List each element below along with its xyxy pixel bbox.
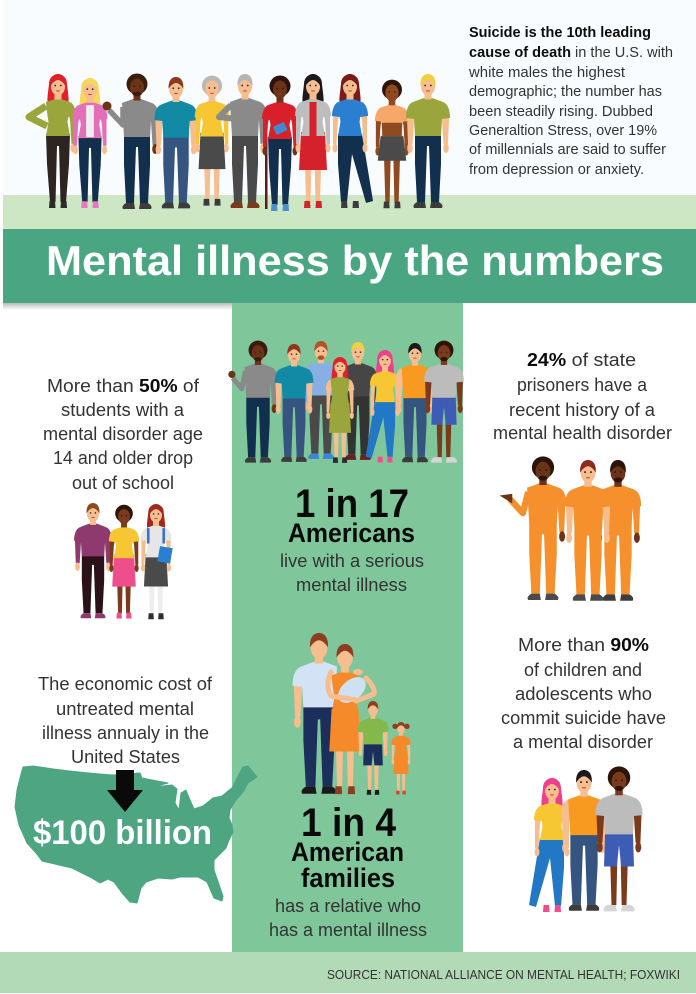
text block: children statistic: commit suicide have	[501, 708, 666, 728]
banner	[3, 229, 696, 303]
person: man in orange tank top	[395, 343, 435, 462]
text block: economic cost	[38, 674, 213, 767]
arrow: down	[107, 770, 143, 812]
statistic: 1 in 4 American families: American	[291, 837, 404, 867]
text block: students statistic: More than 50% of	[47, 376, 200, 396]
statistic: 1 in 17 Americans: Americans	[288, 518, 415, 548]
person: man waving in grey sweater	[228, 341, 278, 463]
person: man in light blue t-shirt	[302, 341, 340, 459]
person: red-haired woman	[29, 74, 76, 208]
text block: suicide statistic: Generaltion Stress, over 19%	[469, 123, 657, 139]
father's hand on mother's shoulder	[353, 669, 363, 675]
illustration: crowd of eleven people	[29, 74, 450, 211]
person: father	[293, 633, 337, 794]
statistic: 1 in 17 Americans	[280, 482, 424, 595]
text block: economic cost: United States	[71, 747, 180, 767]
text block: prisoners statistic: 24% of state	[527, 350, 636, 370]
text block: economic cost: The economic cost of	[38, 674, 213, 694]
person: mother	[329, 644, 361, 794]
text block: children statistic: of children and	[524, 660, 642, 680]
text block: suicide statistic	[468, 25, 673, 178]
text block: students statistic: mental disorder age	[43, 424, 203, 444]
person: woman in red top with blue clutch	[262, 76, 298, 211]
text block: economic cost: illness annualy in the	[42, 723, 209, 743]
banner shadow	[3, 303, 232, 310]
walking cane	[265, 137, 268, 209]
text block: prisoners statistic	[493, 350, 672, 443]
text block: children statistic: adolescents who	[515, 684, 652, 704]
text block: suicide statistic: been steadily rising. Dubbed	[469, 104, 653, 120]
person: prisoner on right	[595, 460, 641, 601]
person: prisoner in centre	[565, 460, 611, 601]
illustration: three young people	[529, 766, 643, 912]
illustration: three students	[74, 503, 173, 619]
person: dark-haired woman in red dress and grey jacket	[295, 74, 331, 208]
text block: students statistic: 14 and older drop	[53, 448, 193, 468]
statistic: 1 in 17 Americans: 1 in 17	[295, 482, 409, 526]
person: prisoner with raised hand	[503, 456, 566, 600]
illustration: three prisoners	[503, 456, 641, 601]
person: blond man in dark sweater	[339, 342, 377, 460]
text block: prisoners statistic: recent history of a	[509, 400, 656, 420]
panel: center column	[232, 303, 463, 952]
person: girl in yellow top and pink skirt	[109, 505, 139, 619]
person: blond man in olive t-shirt	[406, 74, 450, 208]
illustration: family	[293, 633, 411, 795]
person: man in grey t-shirt and blue shorts	[424, 341, 464, 463]
person: red-haired woman in green dress	[326, 357, 354, 463]
statistic: 1 in 17 Americans: live with a serious	[280, 551, 424, 571]
person: man in teal t-shirt	[275, 344, 313, 462]
text block: suicide statistic: Suicide is the 10th leading	[469, 25, 651, 41]
person: older woman in yellow	[195, 76, 229, 206]
map of the United States	[15, 766, 257, 903]
text block: suicide statistic: white males the highest	[468, 65, 625, 81]
person: boy in maroon sweater	[74, 503, 112, 618]
statistic: 1 in 4 American families: 1 in 4	[301, 801, 397, 845]
text block: suicide statistic: demographic; the number has	[469, 84, 662, 100]
text block: students statistic: students with a	[61, 400, 185, 420]
text block: children statistic: a mental disorder	[513, 732, 653, 752]
text block: children statistic: More than 90%	[518, 635, 649, 655]
person: older man with grey hair	[219, 74, 267, 208]
person: pink-haired woman	[529, 778, 570, 912]
ground band	[3, 195, 696, 229]
title: Mental illness by the numbers	[46, 237, 664, 284]
statistic: 1 in 4 American families: has a mental illness	[269, 920, 427, 940]
text block: suicide statistic: from depression or anxiety.	[469, 162, 644, 178]
person: blonde woman in pink	[73, 78, 107, 208]
illustration: group of eight people	[228, 341, 464, 463]
sky band	[3, 0, 696, 196]
person: man in teal t-shirt	[154, 77, 198, 208]
person: man in orange tank top	[561, 770, 607, 911]
statistic: 1 in 4 American families	[269, 801, 427, 940]
person: schoolgirl with book	[141, 504, 173, 619]
person: woman in blue top	[332, 74, 373, 208]
text block: economic cost: untreated mental	[56, 699, 194, 719]
cost figure: $100 billion	[33, 814, 212, 852]
person: woman in orange crop top	[375, 80, 409, 208]
text block: prisoners statistic: prisoners have a	[517, 375, 648, 395]
person: girl	[391, 722, 411, 794]
person: boy	[358, 701, 388, 795]
text block: students statistic	[43, 376, 203, 493]
statistic: 1 in 4 American families: has a relative who	[275, 896, 421, 916]
person: man in grey t-shirt and blue shorts	[595, 766, 643, 911]
text block: children statistic	[501, 635, 666, 752]
text block: suicide statistic: cause of death in the U.S. with	[469, 45, 673, 61]
statistic: 1 in 4 American families: families	[301, 863, 395, 893]
text block: prisoners statistic: mental health disorder	[493, 423, 672, 443]
person: man waving in grey	[102, 74, 159, 209]
text block: students statistic: out of school	[72, 473, 174, 493]
baby in blanket	[328, 672, 374, 708]
footer band	[0, 952, 696, 993]
text block: suicide statistic: of millennials are said to suffer	[469, 142, 666, 158]
person: pink-haired woman in yellow top	[366, 350, 400, 463]
statistic: 1 in 17 Americans: mental illness	[296, 575, 407, 595]
